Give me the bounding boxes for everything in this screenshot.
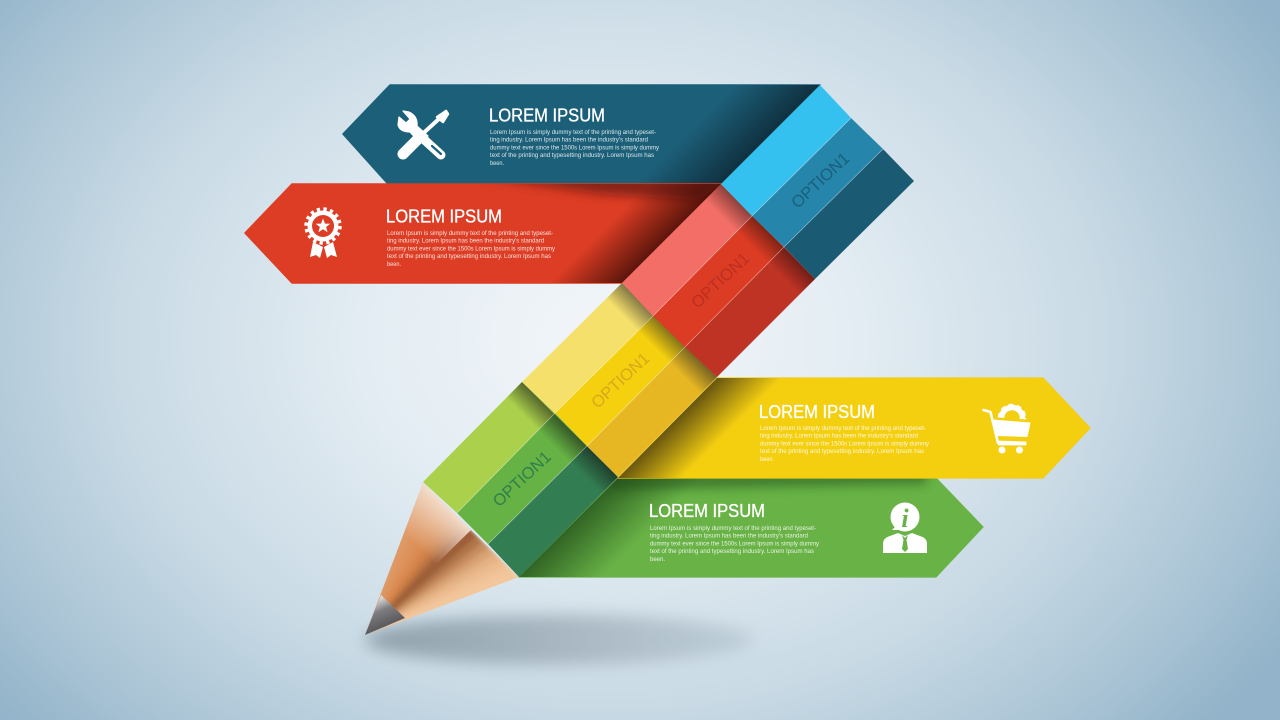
ground shadow (365, 615, 755, 665)
body text: text of the printing and typesetting industry. Lorem Ipsum has (760, 449, 924, 455)
icon: person with info bubble (883, 502, 927, 553)
body text: Lorem Ipsum is simply dummy text of the printing and typeset- (650, 526, 816, 532)
banner: blue (343, 85, 820, 184)
body text: dummy text ever since the 1500s Lorem Ipsum is simply dummy (650, 541, 819, 547)
banner: green (519, 470, 983, 577)
body text: been. (650, 557, 665, 563)
body text: dummy text ever since the 1500s Lorem Ipsum is simply dummy (490, 145, 659, 151)
body text: been. (760, 457, 774, 463)
body text: text of the printing and typesetting industry. Lorem Ipsum has (490, 153, 654, 159)
body text (387, 231, 555, 268)
icon: shopping cart with gear (984, 406, 1030, 454)
heading: LOREM IPSUM (489, 106, 605, 126)
banner: yellow (618, 378, 1090, 478)
info glyph: i (901, 504, 909, 533)
pencil segment: red (622, 184, 815, 377)
heading: LOREM IPSUM (386, 206, 502, 226)
body text: Lorem Ipsum is simply dummy text of the printing and typeset- (760, 426, 926, 432)
pencil segment: green (423, 382, 618, 577)
body text (650, 526, 819, 563)
body text: been. (387, 262, 401, 268)
pencil segment: blue (721, 85, 914, 279)
body text: dummy text ever since the 1500s Lorem Ipsum is simply dummy (760, 441, 929, 447)
body text: ting industry. Lorem Ipsum has been the industry's standard (760, 434, 918, 440)
body text: dummy text ever since the 1500s Lorem Ipsum is simply dummy (387, 246, 555, 252)
icon: award medal (306, 209, 340, 258)
body text: been. (490, 161, 504, 167)
pencil segment: yellow (522, 283, 717, 477)
option label: OPTION1 (490, 448, 555, 511)
option label: OPTION1 (788, 149, 853, 212)
pencil tip: lead (365, 595, 405, 635)
heading: LOREM IPSUM (759, 402, 875, 422)
body text: text of the printing and typesetting industry. Lorem Ipsum has (650, 549, 814, 555)
option label: OPTION1 (588, 349, 653, 412)
body text (760, 426, 929, 463)
body text: text of the printing and typesetting industry. Lorem Ipsum has (387, 254, 551, 260)
option label: OPTION1 (688, 249, 753, 312)
body text: ting industry. Lorem Ipsum has been the industry's standard (387, 239, 544, 245)
body text: Lorem Ipsum is simply dummy text of the printing and typeset- (387, 231, 553, 237)
body text: ting industry. Lorem Ipsum has been the industry's standard (650, 534, 808, 540)
heading: LOREM IPSUM (649, 501, 765, 521)
icon: wrench and screwdriver (398, 111, 448, 155)
body text (490, 130, 659, 167)
banner: red (245, 176, 730, 283)
body text: Lorem Ipsum is simply dummy text of the printing and typeset- (490, 130, 656, 136)
body text: ting industry. Lorem Ipsum has been the industry's standard (490, 138, 648, 144)
pencil tip: wood (365, 483, 519, 635)
